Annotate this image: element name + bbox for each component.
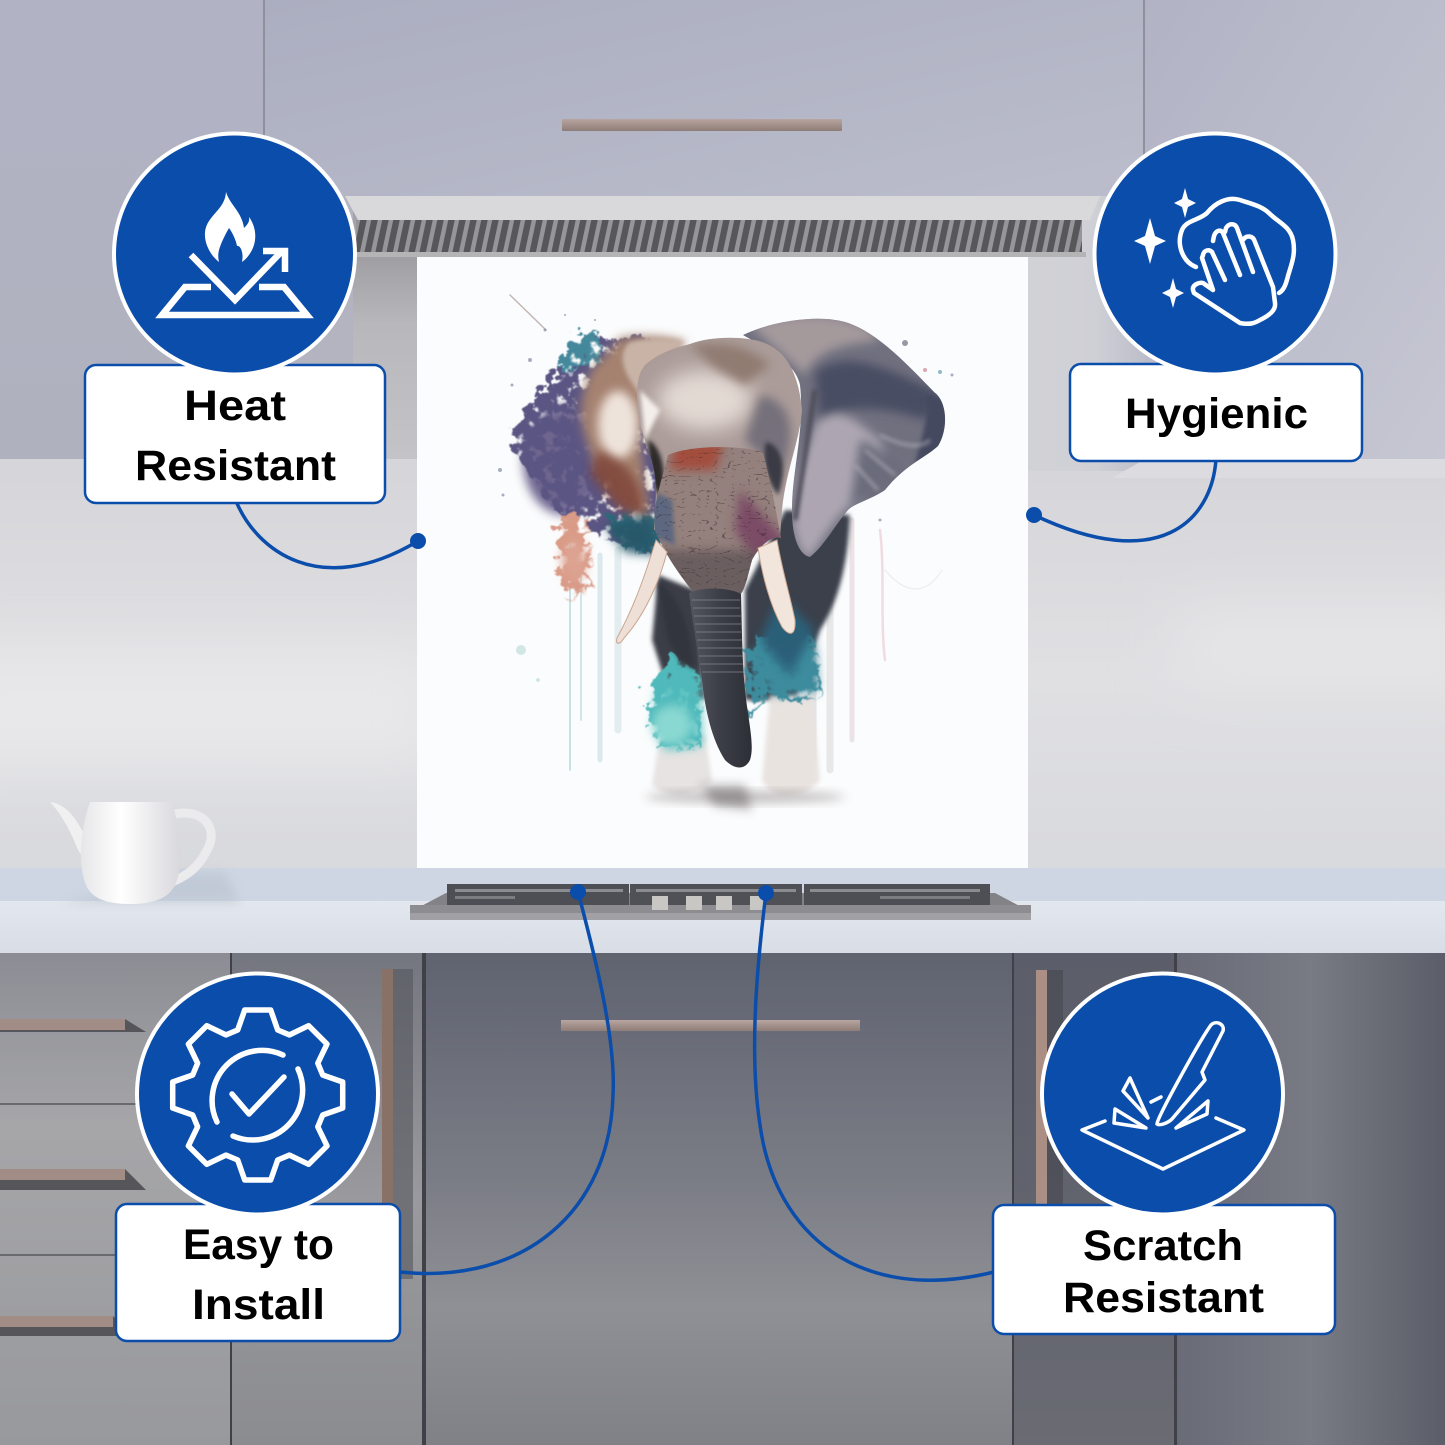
lower cabinets [0, 953, 1445, 1445]
connector: scratch resistant [755, 885, 994, 1280]
label box [1070, 364, 1362, 461]
icon: gear with check [173, 1010, 343, 1180]
circle badge [114, 134, 355, 374]
upper cabinets [0, 0, 1445, 470]
upper cabinet handle [562, 119, 842, 131]
trunk base [654, 447, 781, 594]
label text: Resistant [135, 442, 336, 490]
icon: flame on surface [162, 192, 307, 315]
connector: hygienic [1026, 459, 1216, 541]
label text: Heat [184, 382, 286, 430]
right ear [740, 315, 950, 560]
label text: Install [192, 1281, 325, 1329]
label text: Easy to [183, 1221, 334, 1269]
gas hob [410, 884, 1031, 920]
splashback panel [417, 257, 1028, 868]
circle badge [1094, 134, 1336, 374]
cabinet handles [0, 1019, 146, 1032]
body and legs [745, 510, 850, 700]
left ear [581, 336, 687, 520]
label text: Hygienic [1125, 390, 1308, 438]
circle badge [1042, 974, 1283, 1214]
label text [135, 382, 336, 490]
label text: Resistant [1063, 1274, 1264, 1322]
callout: scratch resistant [993, 974, 1335, 1334]
teal paint splash [645, 620, 822, 752]
tusks [617, 540, 667, 643]
icon: knife scratching surface [1082, 1023, 1244, 1169]
lower trunk [689, 589, 752, 768]
worktop [0, 868, 1445, 902]
left ear splash [510, 332, 670, 600]
paint drips [510, 295, 942, 770]
callout: heat resistant [85, 134, 385, 503]
teapot [50, 802, 240, 904]
callout: easy to install [116, 974, 400, 1341]
ground shadow [645, 791, 845, 803]
shelf undersides [0, 459, 417, 479]
extractor hood [345, 196, 1100, 220]
connector: easy to install [400, 884, 613, 1273]
elephant artwork [498, 295, 954, 810]
paint speckles [498, 314, 954, 682]
label box [85, 365, 385, 503]
callout: hygienic [1070, 134, 1362, 461]
label text [183, 1221, 334, 1329]
circle badge [137, 974, 378, 1214]
icon: cleaning hand [1134, 188, 1294, 324]
connector: heat resistant [236, 501, 426, 568]
wall [0, 470, 1445, 880]
head [637, 338, 802, 534]
label box [993, 1205, 1335, 1334]
label text: Scratch [1083, 1222, 1243, 1270]
label text [1063, 1222, 1264, 1322]
label box [116, 1204, 400, 1341]
